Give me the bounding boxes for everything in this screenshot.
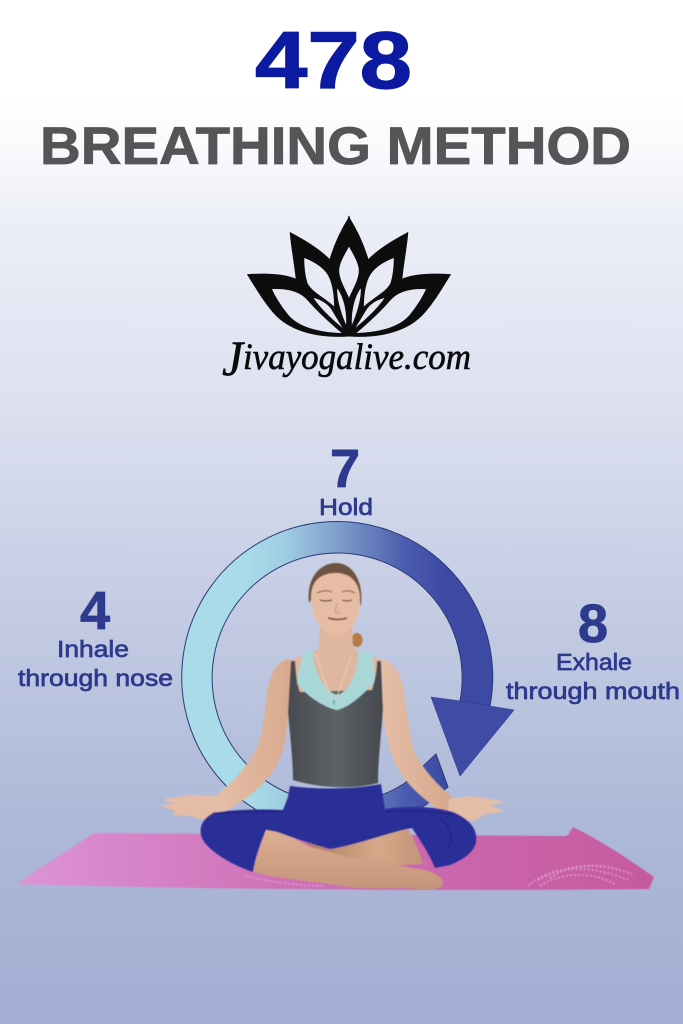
title: 478: 478 xyxy=(255,16,412,106)
hair bun xyxy=(352,633,362,647)
label: exhale: through mouth xyxy=(506,678,680,704)
right hand xyxy=(448,797,502,820)
mint under layer xyxy=(297,650,375,710)
site name: ivayogalive.com xyxy=(243,337,471,378)
label: exhale: Exhale xyxy=(556,649,632,675)
eyebrows xyxy=(317,591,355,593)
label: hold: 7 xyxy=(330,439,360,499)
leggings fold shading xyxy=(213,811,453,850)
necklace pendant xyxy=(332,699,336,705)
left arm xyxy=(213,659,296,814)
label: inhale: through nose xyxy=(18,665,173,691)
site name: J xyxy=(222,330,246,386)
ring band xyxy=(182,522,493,833)
neck and shoulders xyxy=(290,625,382,720)
arrowhead xyxy=(431,697,514,776)
label: hold: Hold xyxy=(319,494,373,520)
necklace xyxy=(316,654,352,703)
eyes xyxy=(320,600,352,601)
arrow: circular breathing cycle xyxy=(182,522,514,833)
label: exhale: 8 xyxy=(578,594,608,654)
right arm xyxy=(376,659,452,815)
face xyxy=(311,573,360,636)
label: hold xyxy=(319,439,373,520)
icon: lotus flower xyxy=(248,218,450,336)
label: inhale: 4 xyxy=(80,581,110,641)
label: inhale: Inhale xyxy=(57,636,129,662)
tank top xyxy=(288,661,383,787)
leggings xyxy=(201,784,476,872)
heading: breathing method: BREATHING METHOD xyxy=(40,117,631,176)
yoga mat xyxy=(16,827,654,890)
mouth xyxy=(328,618,347,620)
logo: lotus and site name xyxy=(222,218,471,386)
hair xyxy=(309,563,361,606)
front leg and foot xyxy=(253,830,443,890)
label: exhale xyxy=(506,594,680,704)
back leg xyxy=(305,827,423,866)
left hand xyxy=(164,796,221,819)
woman meditating xyxy=(164,563,502,890)
mat pattern xyxy=(245,865,632,886)
nose xyxy=(335,603,340,613)
label: inhale xyxy=(18,581,173,691)
